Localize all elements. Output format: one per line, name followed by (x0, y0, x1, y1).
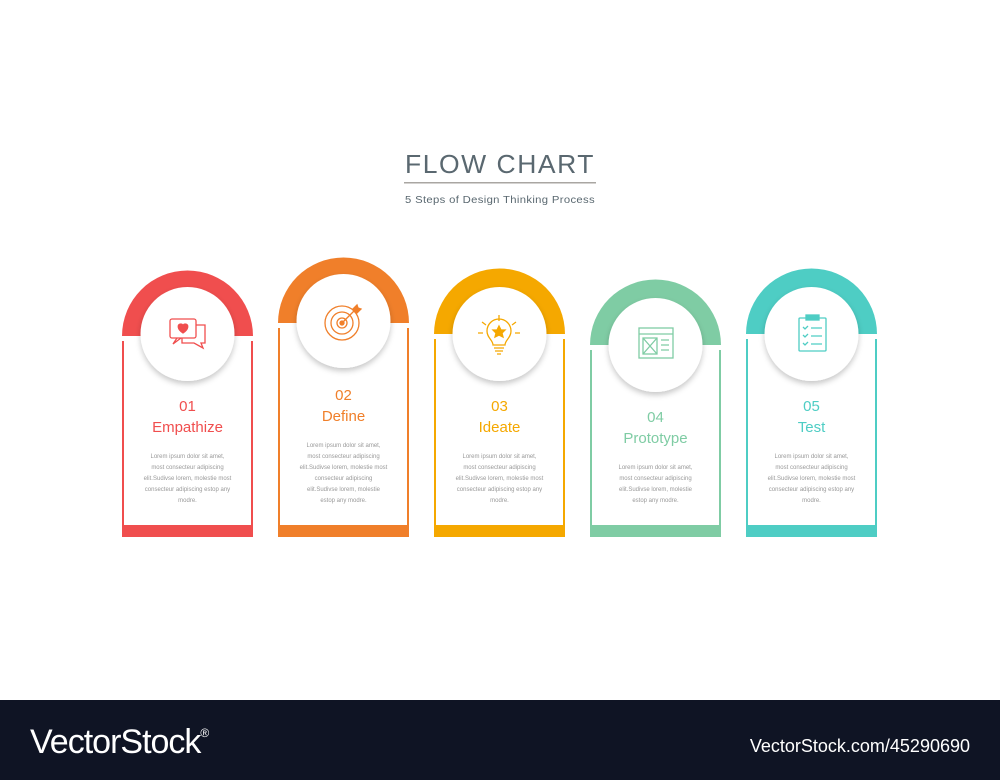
footer bar: ® (200, 726, 209, 740)
card 1: Empathize: consecteur adipiscing estop any (145, 487, 230, 493)
card 2: Define: Define (322, 408, 365, 425)
card 2: Define: estop any modre. (320, 498, 367, 504)
card 3: Ideate: Lorem ipsum dolor sit amet, (462, 454, 537, 460)
card 4: Prototype: estop any modre. (632, 498, 679, 504)
footer bar (0, 700, 1000, 780)
card 1: Empathize: most consecteur adipiscing (151, 465, 224, 471)
card 2: Define: consecteur adipiscing (315, 476, 372, 482)
card 4: Prototype: most consecteur adipiscing (619, 476, 692, 482)
title: FLOW CHART (405, 149, 595, 179)
card 2: Define: elit.Sudivse lorem, molestie most (300, 465, 388, 471)
card 3: Ideate: modre. (490, 498, 509, 504)
card 4: Prototype (590, 280, 721, 537)
card 2: Define (278, 258, 409, 537)
card 2: Define: most consecteur adipiscing (307, 454, 380, 460)
card 5: Test: most consecteur adipiscing (775, 465, 848, 471)
card 5: Test (746, 268, 877, 537)
card 3: Ideate (434, 268, 565, 537)
icon: chat heart (170, 319, 205, 348)
card 1: Empathize: modre. (178, 498, 197, 504)
card 5: Test: 05 (803, 398, 820, 415)
footer bar: VectorStock.com/45290690 (750, 736, 970, 756)
card 5: Test: Lorem ipsum dolor sit amet, (774, 454, 849, 460)
card 5: Test: Test (798, 419, 826, 436)
icon: wireframe (639, 328, 673, 358)
card 2: Define: 02 (335, 387, 352, 404)
card 2: Define: Lorem ipsum dolor sit amet, (306, 443, 381, 449)
card 5: Test: elit.Sudivse lorem, molestie most (768, 476, 856, 482)
card 5: Test: modre. (802, 498, 821, 504)
card 3: Ideate: 03 (491, 398, 508, 415)
card 4: Prototype: Lorem ipsum dolor sit amet, (618, 465, 693, 471)
icon: clipboard (799, 315, 826, 351)
title (404, 149, 596, 206)
card 4: Prototype: Prototype (623, 430, 688, 447)
card 3: Ideate: elit.Sudivse lorem, molestie most (456, 476, 544, 482)
icon: lightbulb (478, 315, 520, 354)
card 1: Empathize: Lorem ipsum dolor sit amet, (150, 454, 225, 460)
card 3: Ideate: Ideate (479, 419, 520, 436)
icon: target (325, 305, 361, 340)
card 1: Empathize: Empathize (152, 419, 223, 436)
card 5: Test: consecteur adipiscing estop any (769, 487, 854, 493)
footer bar: VectorStock (30, 723, 200, 761)
card 1: Empathize: 01 (179, 398, 196, 415)
card 4: Prototype: elit.Sudivse lorem, molestie (619, 487, 693, 493)
card 2: Define: elit.Sudivse lorem, molestie (307, 487, 381, 493)
card 3: Ideate: consecteur adipiscing estop any (457, 487, 542, 493)
card 1: Empathize (122, 271, 253, 537)
title: 5 Steps of Design Thinking Process (405, 195, 595, 206)
card 4: Prototype: 04 (647, 409, 664, 426)
card 3: Ideate: most consecteur adipiscing (463, 465, 536, 471)
card 1: Empathize: elit.Sudivse lorem, molestie most (144, 476, 232, 482)
